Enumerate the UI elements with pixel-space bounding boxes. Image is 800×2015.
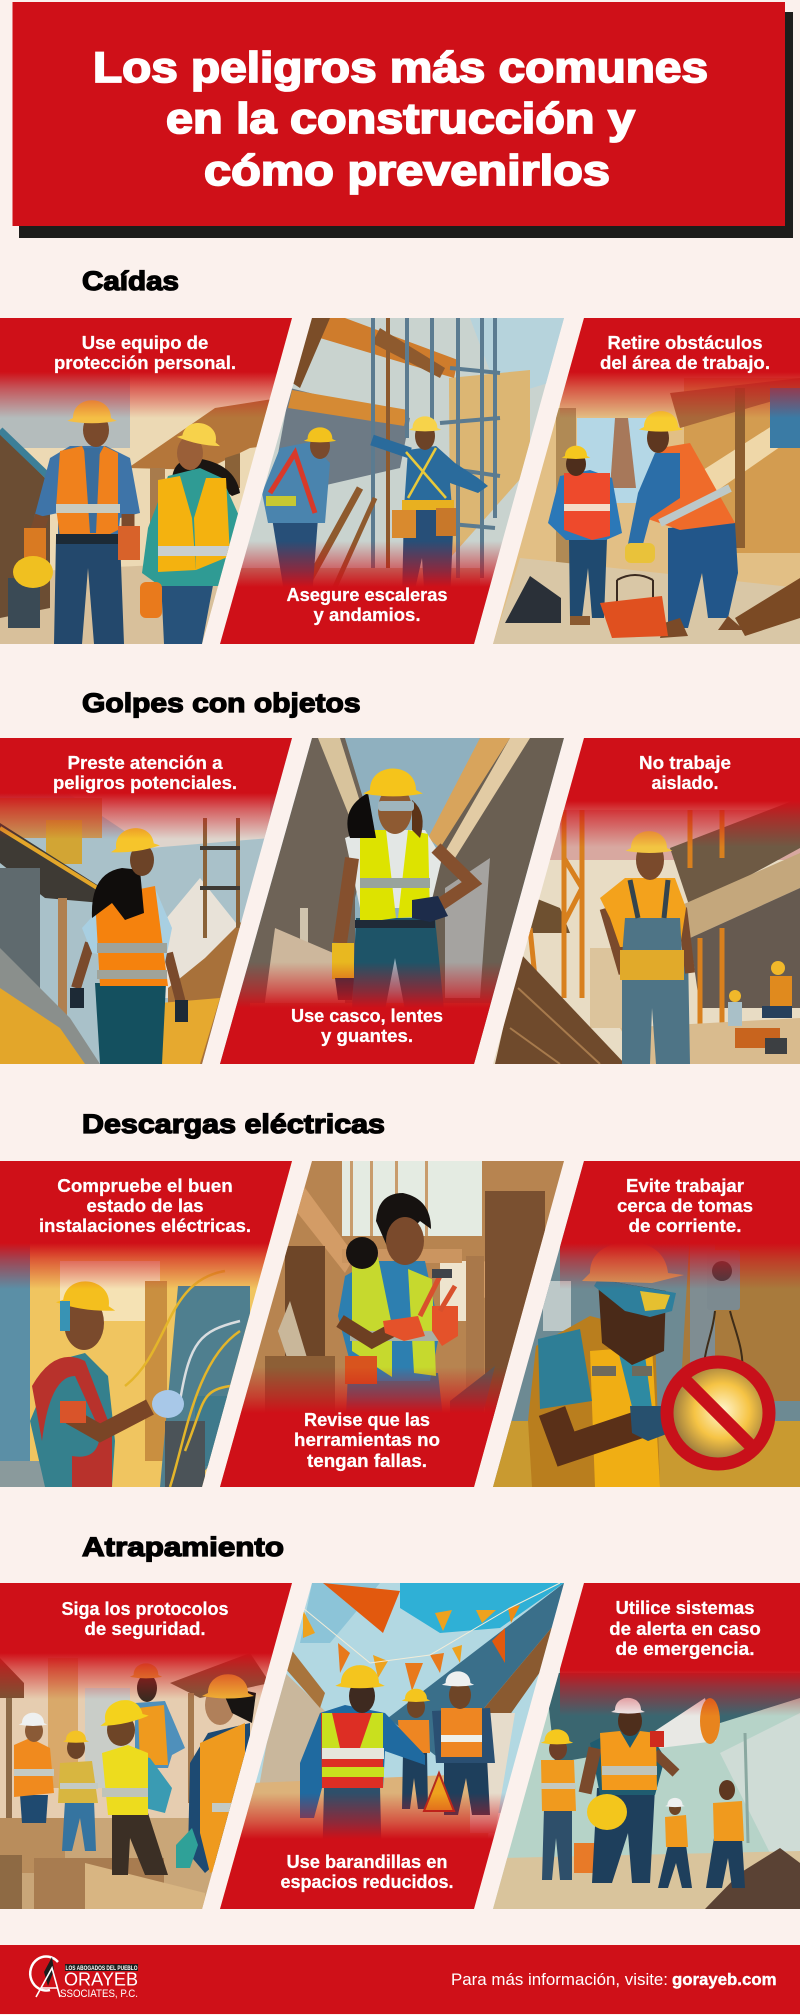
scene: steel frame corridor <box>220 738 564 1064</box>
caption <box>294 1409 440 1471</box>
heading: Golpes con objetos: Golpes con objetos <box>82 688 361 718</box>
worker: yellow-hat man <box>398 1689 430 1809</box>
scene: workshop with outlet <box>490 1161 800 1487</box>
caption: Compruebe el buen <box>57 1175 233 1196</box>
worker: white-hat man <box>432 1671 495 1815</box>
caption: espacios reducidos. <box>280 1871 454 1892</box>
caption band <box>560 318 800 418</box>
caption <box>54 332 236 373</box>
heading: Atrapamiento: Atrapamiento <box>82 1532 284 1562</box>
caption: de emergencia. <box>616 1638 754 1659</box>
caption band <box>220 964 501 1064</box>
caption: estado de las <box>86 1195 204 1216</box>
caption <box>40 1178 250 1232</box>
caption: Asegure escaleras <box>286 584 448 605</box>
caption <box>291 1005 443 1046</box>
caption <box>62 1598 228 1639</box>
worker: woman with white hat <box>14 1713 54 1823</box>
caption: protección personal. <box>54 352 236 373</box>
worker: right man in navy jacket <box>176 1674 256 1873</box>
caption: y guantes. <box>321 1025 413 1046</box>
caption: y andamios. <box>314 604 420 625</box>
panel: evitar tomas de corriente <box>490 1161 800 1487</box>
panel: usar barandillas <box>200 1583 580 1909</box>
caption band <box>200 1793 580 1909</box>
caption: Use equipo de <box>82 332 208 353</box>
caption: herramientas no <box>294 1429 440 1450</box>
caption: peligros potenciales. <box>53 772 237 793</box>
caption <box>617 1175 753 1236</box>
caption <box>53 752 237 793</box>
scene: orange scaffolding and concrete beams <box>490 738 800 1064</box>
caption <box>600 332 770 373</box>
caption: de corriente. <box>628 1215 742 1236</box>
logo: Gorayeb & Associates <box>30 1956 138 2000</box>
caption <box>609 1597 761 1659</box>
panel: asegurar escaleras y andamios <box>200 318 580 644</box>
caption: cerca de tomas <box>617 1195 753 1216</box>
scene: construction site background <box>0 318 292 644</box>
worker: red vest <box>548 446 622 625</box>
icon: orange bucket <box>600 575 668 638</box>
caption band <box>220 543 502 644</box>
icon: prohibition sign <box>667 1362 769 1464</box>
scene: city and wooden crates <box>0 1583 292 1909</box>
contact line <box>451 1970 776 1989</box>
logo: Gorayeb & Associates: SSOCIATES, P.C. <box>60 1988 138 2000</box>
icon: orange bag <box>574 1843 598 1873</box>
footer band <box>0 1945 800 2014</box>
scene: sky, pennants and roof <box>220 1583 564 1909</box>
caption band <box>560 1583 800 1716</box>
scene: site with sage wall <box>490 1583 800 1909</box>
caption: aislado. <box>652 772 718 793</box>
worker: harness on ladder <box>262 427 336 598</box>
caption: tengan fallas. <box>307 1450 427 1471</box>
caption: No trabaje <box>639 752 731 773</box>
caption: Use casco, lentes <box>291 1005 443 1026</box>
scene: platform and sand hill <box>0 738 292 1064</box>
caption: Siga los protocolos <box>62 1598 228 1619</box>
icon: sparks <box>672 1361 772 1461</box>
icon: warning triangle <box>424 1773 454 1811</box>
caption: Preste atención a <box>68 752 223 773</box>
worker: man with megaphone <box>585 1698 676 1883</box>
panel: no trabajar aislado <box>490 738 800 1064</box>
caption: del área de trabajo. <box>600 352 770 373</box>
worker: woman with glasses and yellow vest <box>332 768 472 1010</box>
title banner: Los peligros más comunes <box>93 44 708 92</box>
scene: electrical room <box>0 1161 292 1487</box>
scene: wooden framing and crane <box>490 318 800 644</box>
caption band <box>0 1161 300 1289</box>
caption <box>640 755 730 790</box>
worker: youngster with yellow vest <box>58 1731 98 1851</box>
caption <box>286 584 448 625</box>
caption: de alerta en caso <box>609 1618 761 1639</box>
heading: Caídas: Caídas <box>82 266 179 296</box>
panel: revisar herramientas <box>200 1161 580 1487</box>
caption: Use barandillas en <box>286 1851 448 1872</box>
worker: centre woman with yellow vest <box>96 1695 172 1875</box>
worker: woman checking tools <box>338 1193 458 1436</box>
heading: Descargas eléctricas: Descargas eléctricas <box>82 1109 385 1139</box>
logo: Gorayeb & Associates: LOS ABOGADOS DEL PUEBLO <box>66 1966 138 1972</box>
worker: man in overalls <box>600 831 690 1064</box>
workers: background crew <box>728 961 792 1054</box>
worker: man with goggles <box>528 1241 684 1487</box>
worker: background man with orange hat <box>130 1663 185 1768</box>
worker: woman seen from behind <box>70 825 188 1064</box>
caption: de seguridad. <box>84 1618 206 1639</box>
worker: woman in yellow vest <box>140 419 240 644</box>
worker: leaning with orange vest <box>625 411 744 638</box>
worker: back view red and yellow vest <box>300 1665 425 1873</box>
caption band <box>560 1161 800 1289</box>
panel: comprobar instalaciones eléctricas <box>0 1161 300 1487</box>
title banner: cómo prevenirlos <box>204 147 610 195</box>
caption: Revise que las <box>304 1409 430 1430</box>
caption: Evite trabajar <box>626 1175 744 1196</box>
panel: prestar atención a peligros <box>0 738 300 1064</box>
worker: back view with yellow straps <box>372 416 488 603</box>
caption band <box>200 1367 580 1487</box>
caption <box>280 1851 454 1892</box>
title banner <box>12 2 793 238</box>
contact line: gorayeb.com <box>672 1970 776 1989</box>
panel: seguir protocolos de seguridad <box>0 1583 300 1909</box>
caption: Utilice sistemas <box>616 1597 754 1618</box>
caption: Retire obstáculos <box>608 332 762 353</box>
caption band <box>560 738 800 847</box>
panel: sistemas de alerta <box>490 1583 800 1909</box>
worker: yellow-hat worker left <box>541 1729 576 1880</box>
scene: timber frame <box>220 1161 564 1487</box>
panel: usar casco, lentes y guantes <box>200 738 580 1064</box>
caption band <box>0 318 300 418</box>
caption band <box>0 1583 300 1699</box>
icon: megaphone <box>650 1698 720 1748</box>
caption band <box>0 738 300 839</box>
panel: retirar obstáculos <box>490 318 800 644</box>
worker: electrician <box>30 1277 184 1487</box>
contact line: Para más información, visite: <box>451 1970 668 1989</box>
scene: scaffolding <box>220 318 564 644</box>
caption: instalaciones eléctricas. <box>39 1215 251 1236</box>
worker: man in orange vest <box>13 400 140 644</box>
title banner: en la construcción y <box>166 95 635 143</box>
worker: small workers walking <box>658 1780 745 1888</box>
logo: Gorayeb & Associates: ORAYEB <box>64 1970 138 1990</box>
panel: usar equipo de protección personal <box>0 318 300 644</box>
